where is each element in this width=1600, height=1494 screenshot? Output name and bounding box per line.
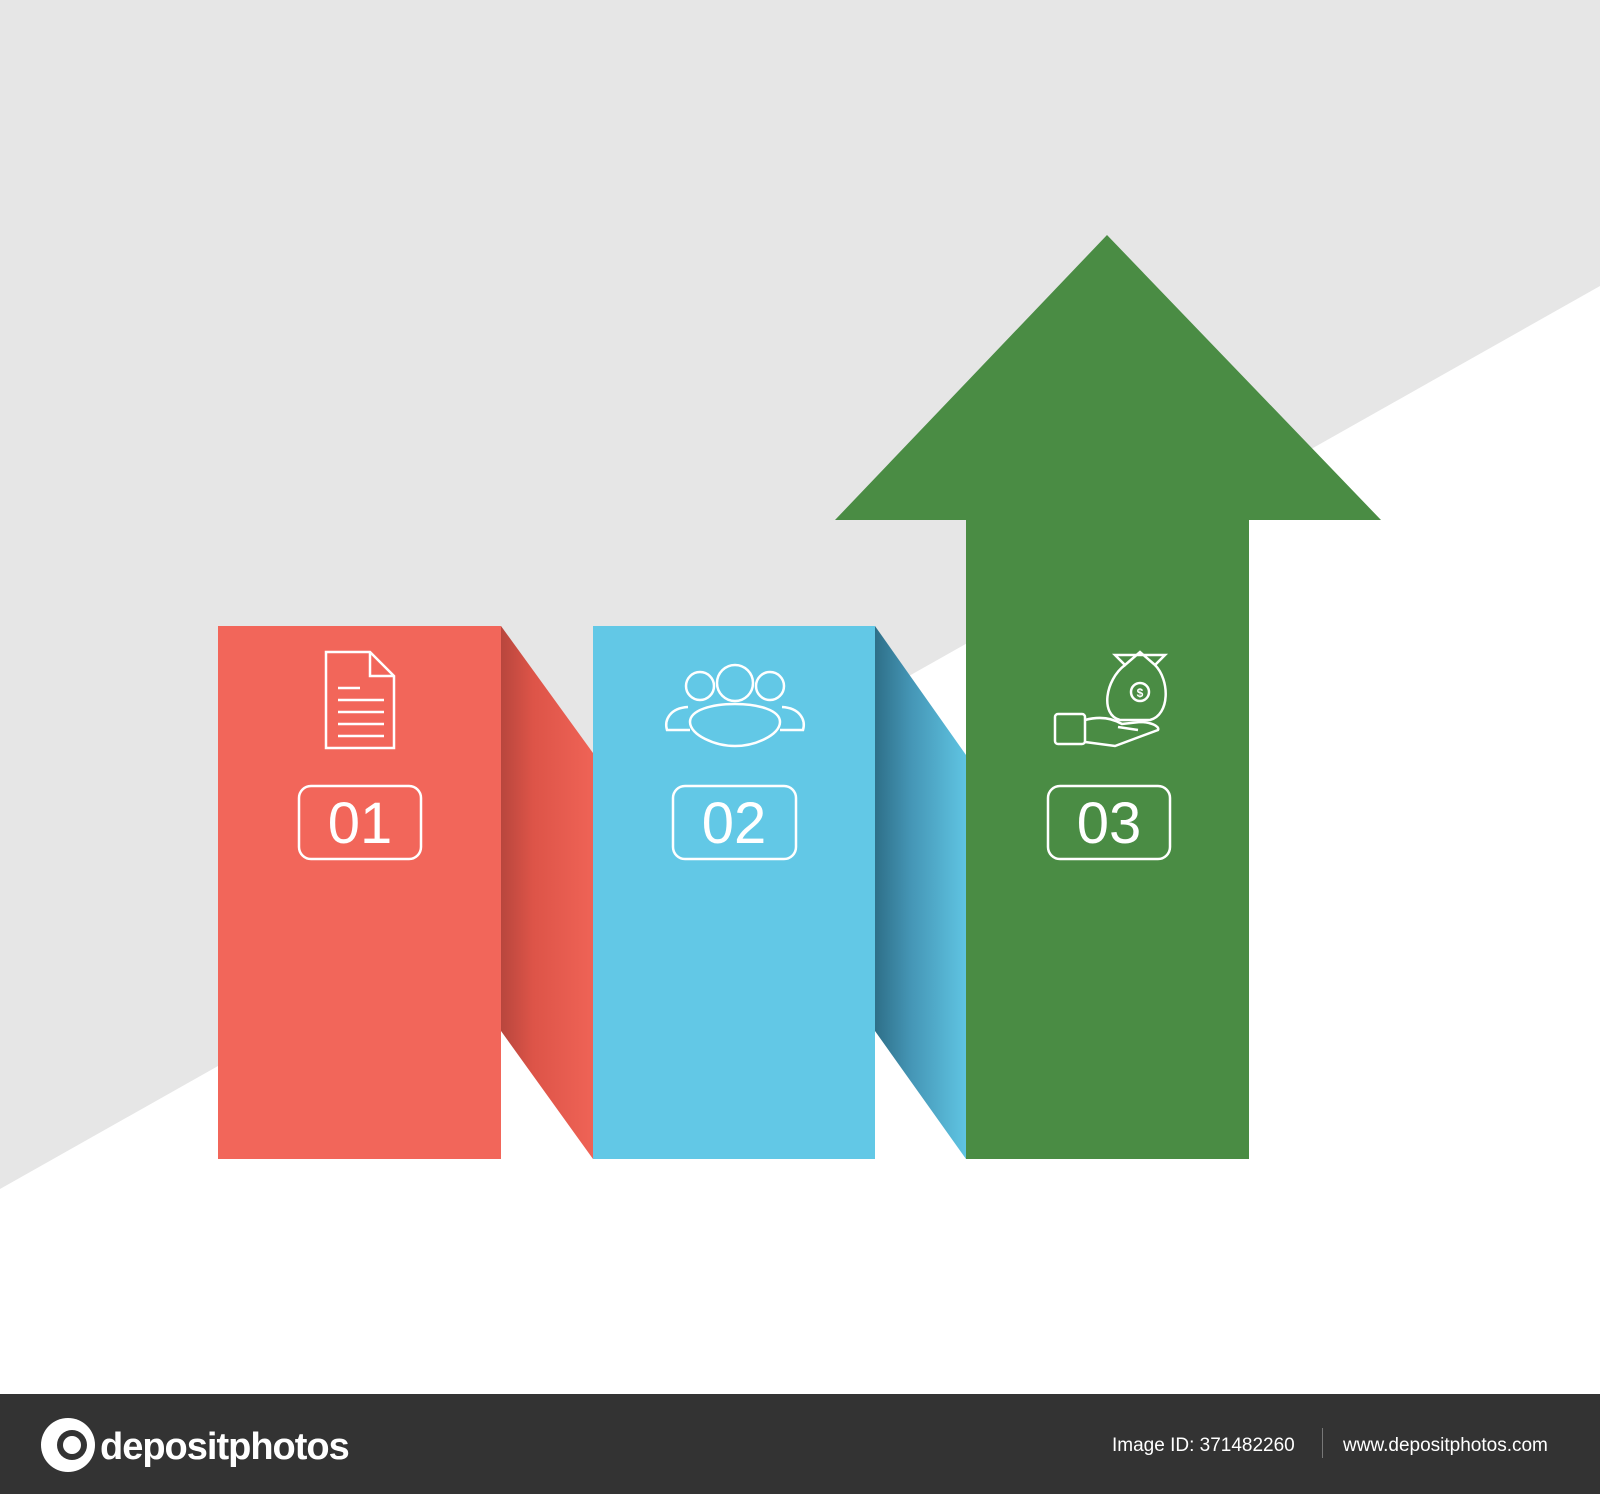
number 02 — [673, 786, 796, 859]
panel: step 02 — [593, 626, 966, 1159]
logo — [41, 1418, 349, 1472]
logo: depositphotos — [100, 1426, 349, 1468]
background grey — [0, 0, 1600, 1189]
panel: step 03 arrow — [835, 235, 1381, 1159]
url: www.depositphotos.com — [1342, 1435, 1548, 1456]
panel: step 03 arrow: $ — [1137, 686, 1144, 700]
number 01: 01 — [328, 791, 392, 856]
number 03: 03 — [1077, 791, 1141, 856]
footer bar — [0, 1394, 1600, 1494]
number 02: 02 — [702, 791, 766, 856]
icon: people — [666, 665, 804, 746]
number 03 — [1048, 786, 1170, 859]
icon: document — [326, 652, 394, 748]
number 01 — [299, 786, 421, 859]
icon: money hand — [1055, 652, 1166, 746]
panel: step 01 — [218, 626, 593, 1159]
image id: Image ID: 371482260 — [1112, 1435, 1295, 1456]
